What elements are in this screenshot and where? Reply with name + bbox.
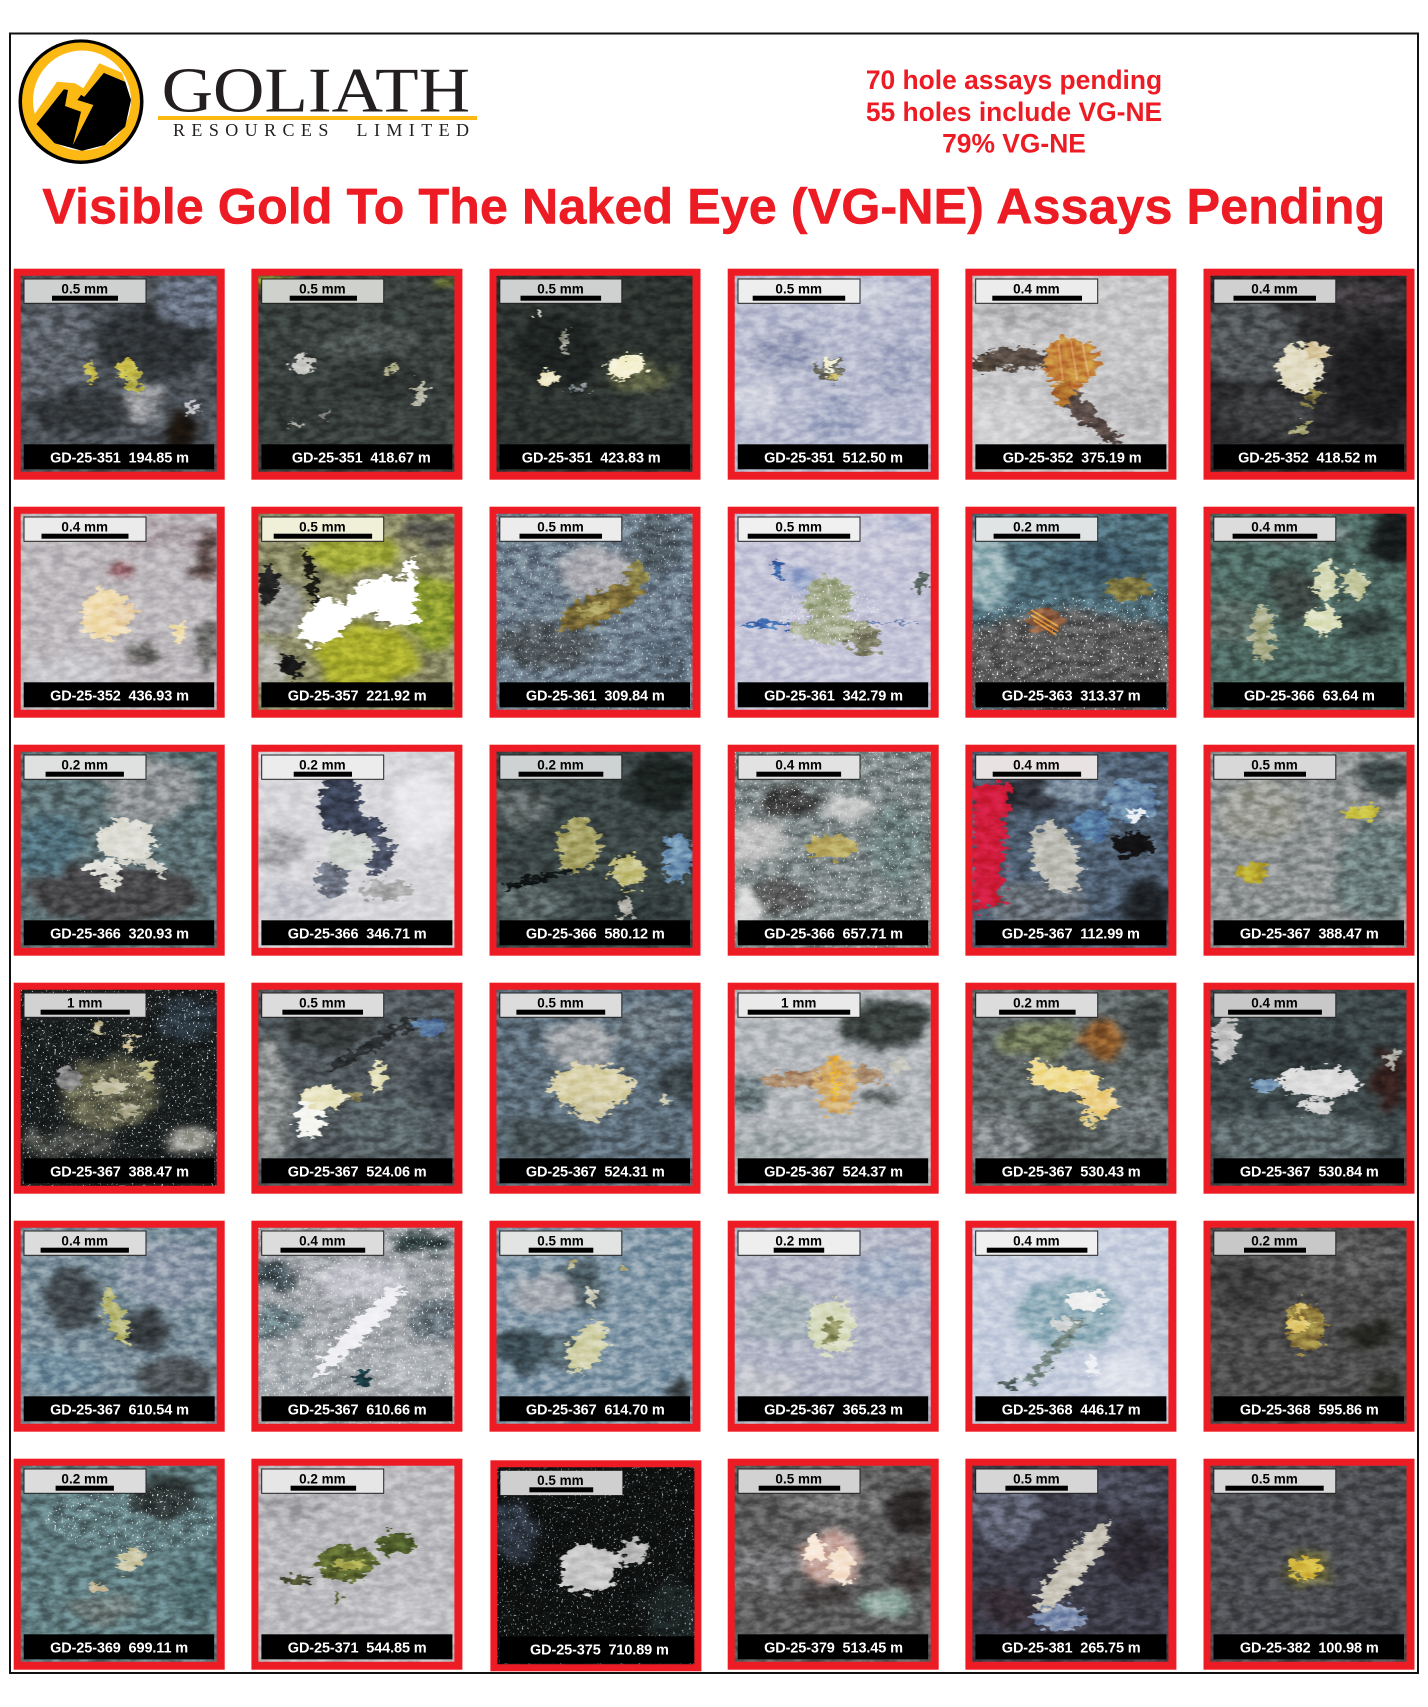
scale bar: 0.5 mm: [61, 281, 108, 296]
tile: GD-25-368 446.17 m: [965, 1221, 1176, 1432]
caption: [261, 682, 452, 707]
tile: GD-25-375 710.89 m: [490, 1460, 702, 1672]
caption: [1214, 1396, 1404, 1421]
scale bar: 0.5 mm: [537, 519, 584, 534]
photo: [734, 276, 931, 472]
photo: [258, 752, 454, 948]
scale bar: 0.4 mm: [1013, 281, 1060, 296]
caption: GD-25-357 221.92 m: [288, 688, 427, 704]
photo: [1203, 1221, 1414, 1431]
scale bar: [1214, 279, 1336, 303]
caption: [500, 1158, 690, 1183]
logo gold rule: [158, 116, 477, 120]
caption: [500, 920, 690, 945]
scale bar: [738, 1469, 860, 1493]
caption: GD-25-366 320.93 m: [50, 926, 189, 942]
tile: GD-25-382 100.98 m: [1203, 1459, 1414, 1670]
caption: [738, 444, 928, 469]
scale bar: [1214, 755, 1336, 779]
scale bar: 0.5 mm: [537, 1473, 584, 1488]
scale bar: [1214, 1231, 1336, 1255]
scale bar: 0.5 mm: [775, 1471, 822, 1486]
photo: [1210, 990, 1406, 1186]
caption: GD-25-363 313.37 m: [1002, 688, 1141, 704]
caption: GD-25-369 699.11 m: [50, 1640, 188, 1656]
caption: GD-25-366 63.64 m: [1244, 688, 1375, 704]
photo: [972, 514, 1168, 710]
scale bar: [738, 755, 860, 779]
photo: [258, 1228, 454, 1424]
photo: [1210, 752, 1406, 948]
scale bar: 0.4 mm: [1251, 519, 1298, 534]
caption: GD-25-375 710.89 m: [530, 1642, 669, 1658]
scale bar: 0.4 mm: [775, 757, 822, 772]
caption: GD-25-367 524.31 m: [526, 1164, 665, 1180]
caption: [738, 1396, 928, 1421]
caption: [261, 1396, 452, 1421]
tile: GD-25-371 544.85 m: [251, 1459, 462, 1670]
tile: GD-25-367 530.43 m: [961, 983, 1176, 1194]
caption: GD-25-352 418.52 m: [1238, 450, 1377, 466]
caption: GD-25-368 446.17 m: [1002, 1402, 1141, 1418]
photo: [734, 752, 931, 948]
caption: GD-25-366 657.71 m: [764, 926, 903, 942]
scale bar: [738, 993, 860, 1017]
scale bar: [500, 1231, 622, 1255]
scale bar: [500, 517, 622, 541]
scale bar: [24, 1231, 146, 1255]
photo: [496, 514, 692, 710]
caption: [261, 920, 452, 945]
caption: [261, 444, 452, 469]
photo: [20, 276, 217, 472]
tile: GD-25-368 595.86 m: [1203, 1221, 1414, 1432]
scale bar: [262, 993, 384, 1017]
caption: GD-25-367 524.37 m: [764, 1164, 903, 1180]
scale bar: 0.5 mm: [775, 519, 822, 534]
caption: [738, 1158, 928, 1183]
stats callout: 55 holes include VG-NE: [866, 97, 1162, 127]
scale bar: [500, 279, 622, 303]
scale bar: [976, 279, 1098, 303]
caption: [975, 1396, 1166, 1421]
scale bar: [262, 755, 384, 779]
scale bar: 0.2 mm: [1013, 995, 1060, 1010]
caption: [1214, 1634, 1404, 1659]
scale bar: 0.2 mm: [1251, 1233, 1298, 1248]
scale bar: 0.5 mm: [1013, 1471, 1060, 1486]
caption: [1214, 1158, 1404, 1183]
caption: [24, 1634, 214, 1659]
caption: [1214, 444, 1404, 469]
tile: GD-25-357 221.92 m: [251, 507, 465, 718]
tile: GD-25-366 63.64 m: [1203, 507, 1419, 718]
caption: GD-25-382 100.98 m: [1240, 1640, 1379, 1656]
caption: [261, 1634, 452, 1659]
photo: [258, 990, 454, 1186]
photo: [734, 514, 931, 710]
scale bar: [500, 1471, 622, 1495]
tile: GD-25-367 610.54 m: [13, 1221, 225, 1432]
tile: GD-25-366 580.12 m: [489, 745, 700, 956]
tile: GD-25-366 346.71 m: [251, 745, 462, 956]
scale bar: [24, 279, 146, 303]
caption: GD-25-361 309.84 m: [526, 688, 665, 704]
tile: GD-25-367 365.23 m: [727, 1221, 939, 1432]
tile: GD-25-351 512.50 m: [727, 269, 939, 480]
caption: [975, 920, 1166, 945]
caption: [24, 444, 214, 469]
caption: [500, 444, 690, 469]
caption: [24, 1158, 214, 1183]
photo: [496, 990, 692, 1186]
scale bar: [738, 1231, 860, 1255]
stats callout: [866, 65, 1162, 159]
tile: GD-25-369 699.11 m: [13, 1459, 225, 1670]
caption: [1214, 920, 1404, 945]
scale bar: [976, 1231, 1098, 1255]
scale bar: 0.4 mm: [61, 1233, 108, 1248]
scale bar: 0.4 mm: [1251, 995, 1298, 1010]
scale bar: 0.5 mm: [537, 1233, 584, 1248]
tile: GD-25-367 388.47 m (1 mm): [13, 983, 225, 1194]
caption: [24, 1396, 215, 1421]
tile: GD-25-352 375.19 m: [965, 269, 1179, 480]
caption: GD-25-367 610.66 m: [288, 1402, 427, 1418]
photo: [1210, 514, 1406, 710]
logo wordmark: GOLIATH: [162, 56, 470, 126]
caption: GD-25-371 544.85 m: [288, 1640, 427, 1656]
caption: [975, 444, 1166, 469]
scale bar: [976, 1469, 1098, 1493]
caption: GD-25-367 530.84 m: [1240, 1164, 1379, 1180]
scale bar: 0.2 mm: [61, 757, 108, 772]
caption: [738, 682, 928, 707]
scale bar: [1214, 517, 1336, 541]
scale bar: [262, 1231, 384, 1255]
caption: [975, 1158, 1166, 1183]
scale bar: 0.4 mm: [299, 1233, 346, 1248]
tile: GD-25-381 265.75 m: [965, 1459, 1176, 1670]
photo: [490, 1460, 702, 1672]
scale bar: [1214, 993, 1336, 1017]
caption: [24, 920, 214, 945]
tile: GD-25-352 418.52 m: [1199, 269, 1417, 480]
scale bar: [24, 517, 146, 541]
caption: GD-25-367 530.43 m: [1002, 1164, 1141, 1180]
caption: GD-25-367 524.06 m: [288, 1164, 427, 1180]
tile: GD-25-351 194.85 m: [13, 269, 236, 480]
caption: [975, 682, 1166, 707]
scale bar: 0.5 mm: [1251, 1471, 1298, 1486]
photo: [496, 752, 692, 948]
scale bar: 0.5 mm: [537, 995, 584, 1010]
photo: [258, 514, 454, 710]
caption: [500, 1396, 690, 1421]
caption: GD-25-367 388.47 m: [50, 1164, 189, 1180]
photo: [965, 1221, 1176, 1431]
tile: GD-25-366 657.71 m: [727, 745, 939, 956]
scale bar: [738, 279, 860, 303]
photo: [20, 1228, 217, 1424]
caption: GD-25-368 595.86 m: [1240, 1402, 1379, 1418]
caption: GD-25-351 423.83 m: [522, 450, 661, 466]
photo: [972, 752, 1168, 948]
photo: [496, 1228, 692, 1424]
tile: GD-25-379 513.45 m: [727, 1459, 939, 1670]
caption: GD-25-361 342.79 m: [764, 688, 903, 704]
caption: GD-25-367 365.23 m: [764, 1402, 903, 1418]
tile: GD-25-363 313.37 m: [947, 507, 1202, 721]
caption: [500, 1636, 694, 1663]
scale bar: 0.2 mm: [61, 1471, 108, 1486]
photo: [734, 990, 931, 1186]
caption: GD-25-379 513.45 m: [764, 1640, 903, 1656]
caption: GD-25-381 265.75 m: [1002, 1640, 1141, 1656]
caption: [738, 1634, 928, 1659]
stats callout: 79% VG-NE: [942, 129, 1086, 159]
tile: GD-25-367 112.99 m: [965, 745, 1176, 956]
caption: [1214, 682, 1404, 707]
photo: [734, 1228, 931, 1424]
scale bar: 0.5 mm: [299, 519, 346, 534]
icon: mountain and lightning emblem: [18, 39, 144, 164]
photo: [972, 276, 1168, 472]
scale bar: [1214, 1469, 1336, 1493]
scale bar: 0.4 mm: [1013, 1233, 1060, 1248]
logo subtitle: RESOURCES LIMITED: [173, 120, 469, 140]
caption: GD-25-352 375.19 m: [1003, 450, 1141, 466]
scale bar: 0.5 mm: [1251, 757, 1298, 772]
tile: GD-25-367 614.70 m: [489, 1221, 700, 1432]
scale bar: [738, 517, 860, 541]
photo: [1203, 1459, 1414, 1669]
scale bar: 0.5 mm: [299, 281, 346, 296]
tile: GD-25-351 423.83 m: [489, 269, 703, 480]
tile: GD-25-367 524.06 m: [251, 983, 465, 1194]
tile: GD-25-367 524.37 m: [727, 983, 939, 1194]
caption: [24, 682, 214, 707]
logo: Goliath Resources Limited: [18, 39, 477, 164]
tile: GD-25-367 530.84 m: [1203, 983, 1414, 1194]
scale bar: [24, 755, 146, 779]
photo: [20, 990, 217, 1186]
caption: GD-25-351 418.67 m: [292, 450, 431, 466]
tile: GD-25-367 524.31 m: [489, 983, 700, 1194]
scale bar: 0.5 mm: [537, 281, 584, 296]
caption: [500, 682, 690, 707]
caption: [261, 1158, 452, 1183]
scale bar: 0.2 mm: [299, 757, 346, 772]
photo: [20, 752, 217, 948]
photo: [1210, 276, 1406, 472]
caption: [738, 920, 928, 945]
scale bar: [500, 755, 622, 779]
scale bar: [24, 1469, 146, 1493]
tile: GD-25-351 418.67 m: [237, 269, 462, 480]
photo: [258, 276, 454, 472]
tile: GD-25-367 610.66 m: [251, 1221, 462, 1432]
caption: GD-25-352 436.93 m: [50, 688, 189, 704]
scale bar: [262, 517, 384, 541]
scale bar: 1 mm: [781, 995, 816, 1010]
scale bar: [262, 1469, 384, 1493]
scale bar: [976, 993, 1098, 1017]
caption: GD-25-366 346.71 m: [288, 926, 427, 942]
scale bar: 0.4 mm: [1251, 281, 1298, 296]
scale bar: 0.2 mm: [1013, 519, 1060, 534]
photo: [13, 1459, 224, 1669]
stats callout: 70 hole assays pending: [866, 65, 1162, 95]
caption: GD-25-367 610.54 m: [50, 1402, 189, 1418]
scale bar: 0.4 mm: [1013, 757, 1060, 772]
caption: GD-25-367 614.70 m: [526, 1402, 665, 1418]
caption: [975, 1634, 1166, 1659]
scale bar: 0.2 mm: [537, 757, 584, 772]
caption: GD-25-351 512.50 m: [764, 450, 903, 466]
caption: GD-25-351 194.85 m: [50, 450, 189, 466]
scale bar: 0.2 mm: [299, 1471, 346, 1486]
scale bar: 0.5 mm: [299, 995, 346, 1010]
scale bar: [262, 279, 384, 303]
tile: GD-25-361 309.84 m: [489, 507, 703, 718]
photo: [965, 1459, 1176, 1669]
caption: GD-25-366 580.12 m: [526, 926, 665, 942]
photo: [496, 276, 692, 472]
scale bar: 0.2 mm: [775, 1233, 822, 1248]
photo: [727, 1459, 938, 1669]
title: Visible Gold To The Naked Eye (VG-NE) Assays Pending: [42, 178, 1385, 234]
tile: GD-25-361 342.79 m: [727, 507, 939, 718]
photo: [251, 1459, 462, 1669]
scale bar: [976, 517, 1098, 541]
tile: GD-25-366 320.93 m: [13, 745, 225, 956]
scale bar: [24, 993, 146, 1017]
photo: [972, 990, 1168, 1186]
scale bar: [500, 993, 622, 1017]
tile: GD-25-352 436.93 m: [13, 507, 225, 718]
scale bar: [976, 755, 1098, 779]
photo: [20, 514, 217, 710]
caption: GD-25-367 388.47 m: [1240, 926, 1379, 942]
tile: GD-25-367 388.47 m: [1203, 745, 1417, 956]
scale bar: 0.5 mm: [775, 281, 822, 296]
scale bar: 1 mm: [67, 995, 102, 1010]
caption: GD-25-367 112.99 m: [1002, 926, 1140, 942]
scale bar: 0.4 mm: [61, 519, 108, 534]
